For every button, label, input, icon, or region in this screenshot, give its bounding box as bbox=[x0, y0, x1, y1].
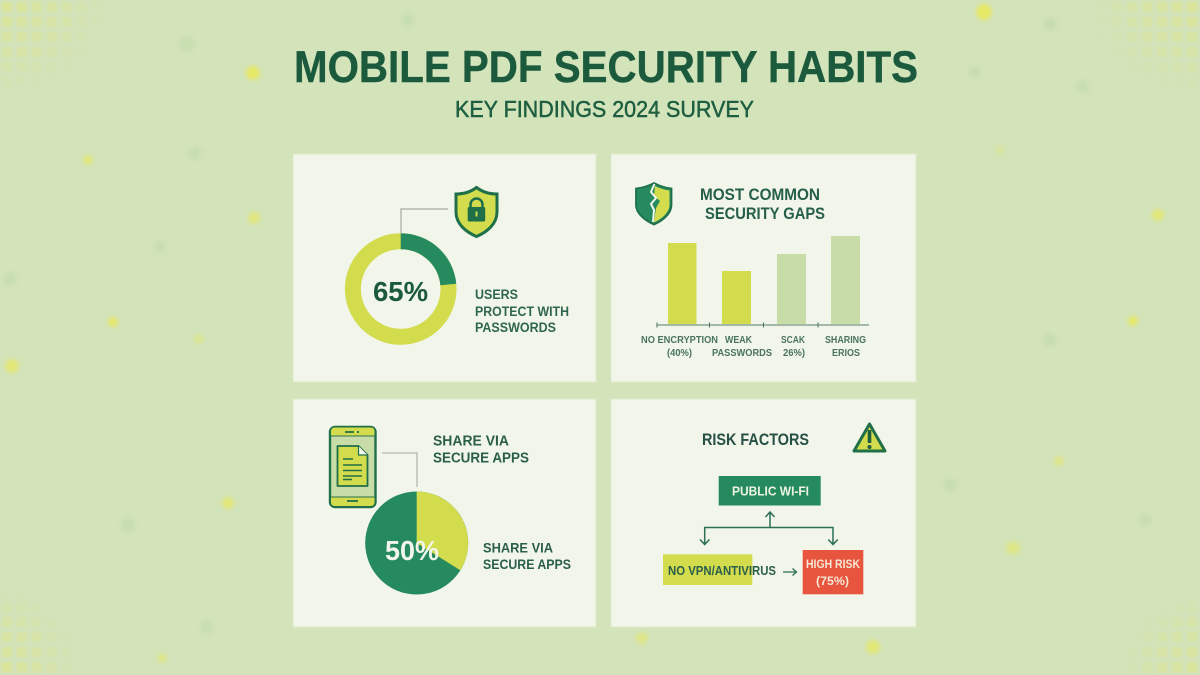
panel: password protection bbox=[293, 154, 596, 382]
box: public wi-fi: PUBLIC WI-FI bbox=[732, 484, 809, 498]
box: no vpn: NO VPN/ANTIVIRUS bbox=[668, 564, 776, 578]
pie caption: SECURE APPS bbox=[483, 556, 571, 572]
connector line bbox=[382, 453, 417, 487]
heading: RISK FACTORS bbox=[702, 431, 809, 449]
icon: shield with lock bbox=[456, 188, 497, 236]
top caption: SECURE APPS bbox=[433, 450, 529, 466]
box: public wi-fi bbox=[719, 476, 821, 506]
pie caption bbox=[483, 540, 571, 572]
box: high risk: (75%) bbox=[816, 574, 849, 588]
top caption bbox=[433, 434, 529, 466]
title: MOBILE PDF SECURITY HABITS bbox=[294, 43, 918, 92]
donut caption: PROTECT WITH bbox=[475, 304, 569, 319]
bar labels: 26%) bbox=[783, 347, 805, 359]
heading bbox=[700, 186, 825, 223]
bar labels: (40%) bbox=[667, 347, 692, 359]
donut value: 65% bbox=[373, 276, 428, 307]
bar labels: ERIOS bbox=[832, 347, 860, 359]
pie caption: SHARE VIA bbox=[483, 540, 553, 556]
donut caption: PASSWORDS bbox=[475, 320, 556, 335]
donut caption bbox=[475, 287, 569, 335]
box: no vpn bbox=[663, 554, 776, 585]
subtitle: KEY FINDINGS 2024 SURVEY bbox=[455, 96, 754, 122]
heading: MOST COMMON bbox=[700, 186, 820, 204]
connector line bbox=[401, 209, 448, 233]
bar chart bbox=[657, 236, 869, 328]
box: high risk bbox=[803, 550, 863, 594]
panel: secure sharing bbox=[293, 399, 596, 627]
flow arrows bbox=[700, 512, 838, 544]
bar labels: SCAK bbox=[781, 334, 805, 346]
panel: security gaps bbox=[611, 154, 916, 382]
bar labels: WEAK bbox=[725, 334, 752, 346]
panel: risk factors bbox=[611, 399, 916, 627]
heading: SECURITY GAPS bbox=[705, 205, 825, 223]
icon: phone with document bbox=[330, 427, 376, 507]
bar labels: PASSWORDS bbox=[712, 347, 772, 359]
pie value: 50% bbox=[385, 535, 439, 566]
bar labels: SHARING bbox=[825, 334, 866, 346]
bar labels: NO ENCRYPTION bbox=[641, 334, 718, 346]
icon: warning triangle bbox=[854, 424, 885, 451]
top caption: SHARE VIA bbox=[433, 434, 509, 450]
box: high risk: HIGH RISK bbox=[806, 559, 861, 571]
bar labels bbox=[641, 334, 866, 359]
arrow to high risk bbox=[783, 568, 796, 576]
donut caption: USERS bbox=[475, 287, 518, 302]
icon: cracked shield bbox=[636, 183, 672, 224]
donut chart: 65% bbox=[353, 241, 449, 337]
pie chart: 50% bbox=[365, 492, 468, 594]
